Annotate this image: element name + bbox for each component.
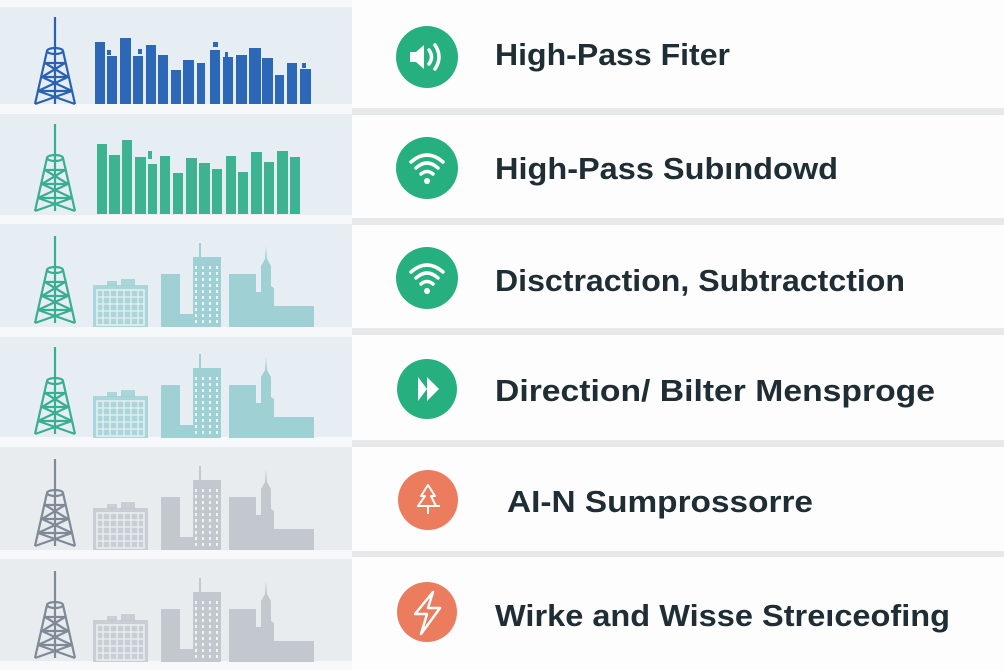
icon: wifi bbox=[396, 247, 458, 309]
icon: speaker bbox=[396, 26, 458, 88]
illustration: teal city bbox=[93, 243, 314, 327]
label: row 2: High-Pass Subındowd bbox=[495, 151, 838, 186]
label: row 6: Wirke and Wisse Streıceofing bbox=[495, 598, 950, 633]
icon: grey tower bbox=[35, 571, 75, 658]
panel: row 3 illustration bbox=[0, 224, 352, 327]
illustration: grey city bbox=[93, 466, 314, 550]
icon: fast forward bbox=[397, 359, 457, 419]
panel: row 5 illustration bbox=[0, 447, 352, 550]
label: row 3: Disctraction, Subtractction bbox=[495, 263, 905, 298]
panel: row 6 illustration bbox=[0, 559, 352, 662]
panel: row 4 illustration bbox=[0, 337, 352, 438]
icon: grey tower bbox=[35, 459, 75, 546]
icon: blue tower bbox=[35, 17, 75, 104]
label: row 4: Direction/ Bilter Mensproge bbox=[495, 373, 935, 408]
bar chart: blue skyline bbox=[95, 38, 311, 104]
icon: wifi bbox=[396, 137, 458, 199]
panel: row 2 illustration bbox=[0, 114, 352, 215]
illustration: teal city bbox=[93, 354, 314, 438]
right cards bbox=[352, 0, 1004, 108]
icon: teal tower bbox=[35, 236, 75, 323]
bar chart: green skyline bbox=[97, 140, 300, 214]
label: row 5: AI-N Sumprossorre bbox=[507, 484, 813, 519]
panel: row 1 illustration bbox=[0, 7, 352, 104]
icon: teal tower bbox=[35, 347, 75, 434]
label: row 1: High-Pass Fiter bbox=[495, 37, 730, 72]
icon: green tower bbox=[35, 124, 75, 211]
illustration: grey city bbox=[93, 578, 314, 662]
icon: lightning bbox=[397, 582, 457, 642]
icon: tree bbox=[398, 470, 458, 530]
